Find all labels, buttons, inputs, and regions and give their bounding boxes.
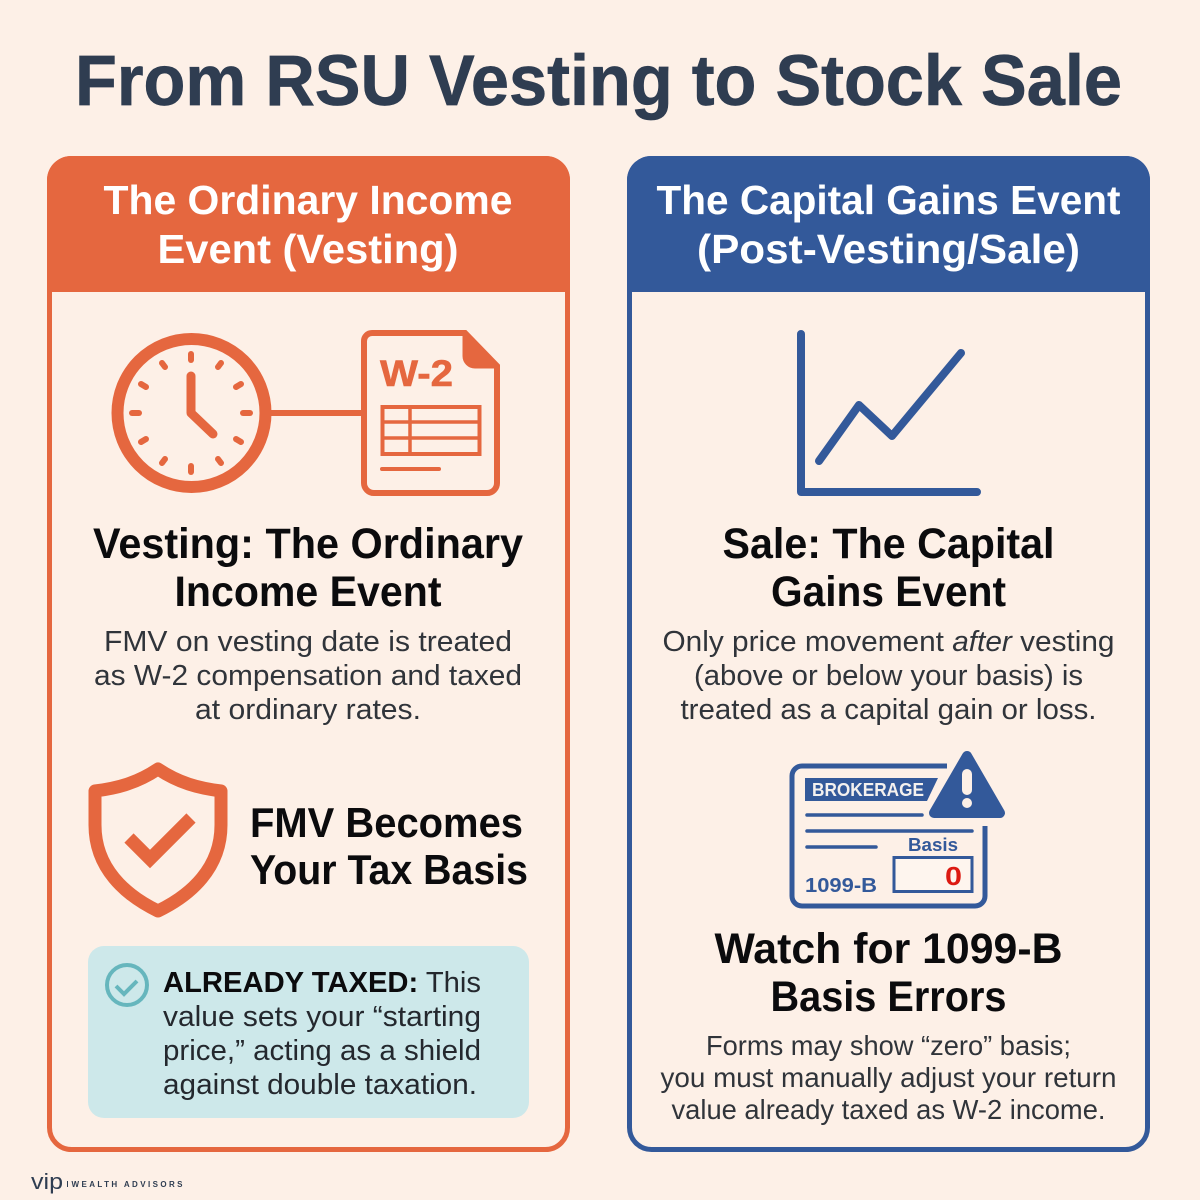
icon: clock linked to W-2 form — [118, 333, 497, 493]
heading: FMV becomes tax basis: Your Tax Basis — [250, 846, 528, 893]
icon: line chart — [801, 334, 977, 492]
icon: brokerage 1099-B form with warning: Basis — [908, 834, 958, 855]
panel header: ordinary income — [47, 156, 570, 292]
icon: clock linked to W-2 form: W-2 — [380, 353, 453, 394]
text: vesting description: FMV on vesting date is treated — [104, 626, 512, 658]
logo: VIP Wealth Advisors — [31, 1169, 183, 1194]
heading: vesting — [93, 520, 523, 616]
heading: sale: Sale: The Capital — [722, 520, 1054, 568]
text: sale description: Only price movement after vesting — [662, 626, 1114, 658]
text: vesting description — [94, 626, 522, 726]
text: vesting description: at ordinary rates. — [195, 694, 421, 726]
panel header: capital gains: The Capital Gains Event — [656, 177, 1121, 223]
callout: already taxed: against double taxation. — [163, 1069, 477, 1101]
icon: brokerage 1099-B form with warning — [792, 756, 1000, 906]
heading: 1099-B errors — [714, 925, 1062, 1021]
heading: FMV becomes tax basis: FMV Becomes — [250, 799, 523, 846]
callout: already taxed: ALREADY TAXED: This — [163, 967, 481, 999]
heading: sale: Gains Event — [771, 568, 1006, 616]
heading: vesting: Vesting: The Ordinary — [93, 520, 523, 568]
text: 1099-B description: value already taxed as W-2 income. — [672, 1094, 1106, 1125]
icon: shield with check — [95, 769, 221, 911]
callout: already taxed — [88, 946, 529, 1118]
text: sale description: treated as a capital gain or loss. — [680, 694, 1096, 726]
heading: sale — [722, 520, 1054, 616]
icon: brokerage 1099-B form with warning: BROKERAGE — [812, 779, 924, 800]
callout: already taxed: price,” acting as a shield — [163, 1035, 481, 1067]
text: 1099-B description: you must manually adjust your return — [660, 1062, 1116, 1093]
logo: VIP Wealth Advisors: WEALTH ADVISORS — [72, 1180, 183, 1189]
heading: FMV becomes tax basis — [250, 799, 528, 893]
panel header: capital gains — [627, 156, 1150, 292]
text: vesting description: as W-2 compensation and taxed — [94, 660, 522, 692]
icon: teal check circle — [107, 965, 147, 1005]
panel header: capital gains: (Post-Vesting/Sale) — [697, 226, 1080, 272]
icon: brokerage 1099-B form with warning: 0 — [945, 861, 962, 891]
text: sale description — [662, 626, 1114, 726]
panel header: ordinary income: Event (Vesting) — [158, 226, 458, 272]
callout: already taxed: value sets your “starting — [163, 1001, 481, 1033]
logo: VIP Wealth Advisors: vip — [31, 1169, 63, 1194]
panel header: ordinary income: The Ordinary Income — [104, 177, 512, 223]
heading: 1099-B errors: Watch for 1099-B — [714, 925, 1062, 973]
heading: 1099-B errors: Basis Errors — [770, 973, 1006, 1021]
text: sale description: (above or below your basis) is — [694, 660, 1083, 692]
icon: warning triangle — [934, 756, 1000, 813]
title: From RSU Vesting to Stock Sale — [75, 42, 1122, 121]
heading: vesting: Income Event — [174, 568, 442, 616]
panel: ordinary income event — [47, 156, 570, 1150]
text: 1099-B description — [660, 1030, 1116, 1125]
icon: brokerage 1099-B form with warning: 1099-B — [805, 875, 877, 897]
panel: capital gains event — [627, 156, 1150, 1150]
text: 1099-B description: Forms may show “zero” basis; — [706, 1030, 1071, 1061]
